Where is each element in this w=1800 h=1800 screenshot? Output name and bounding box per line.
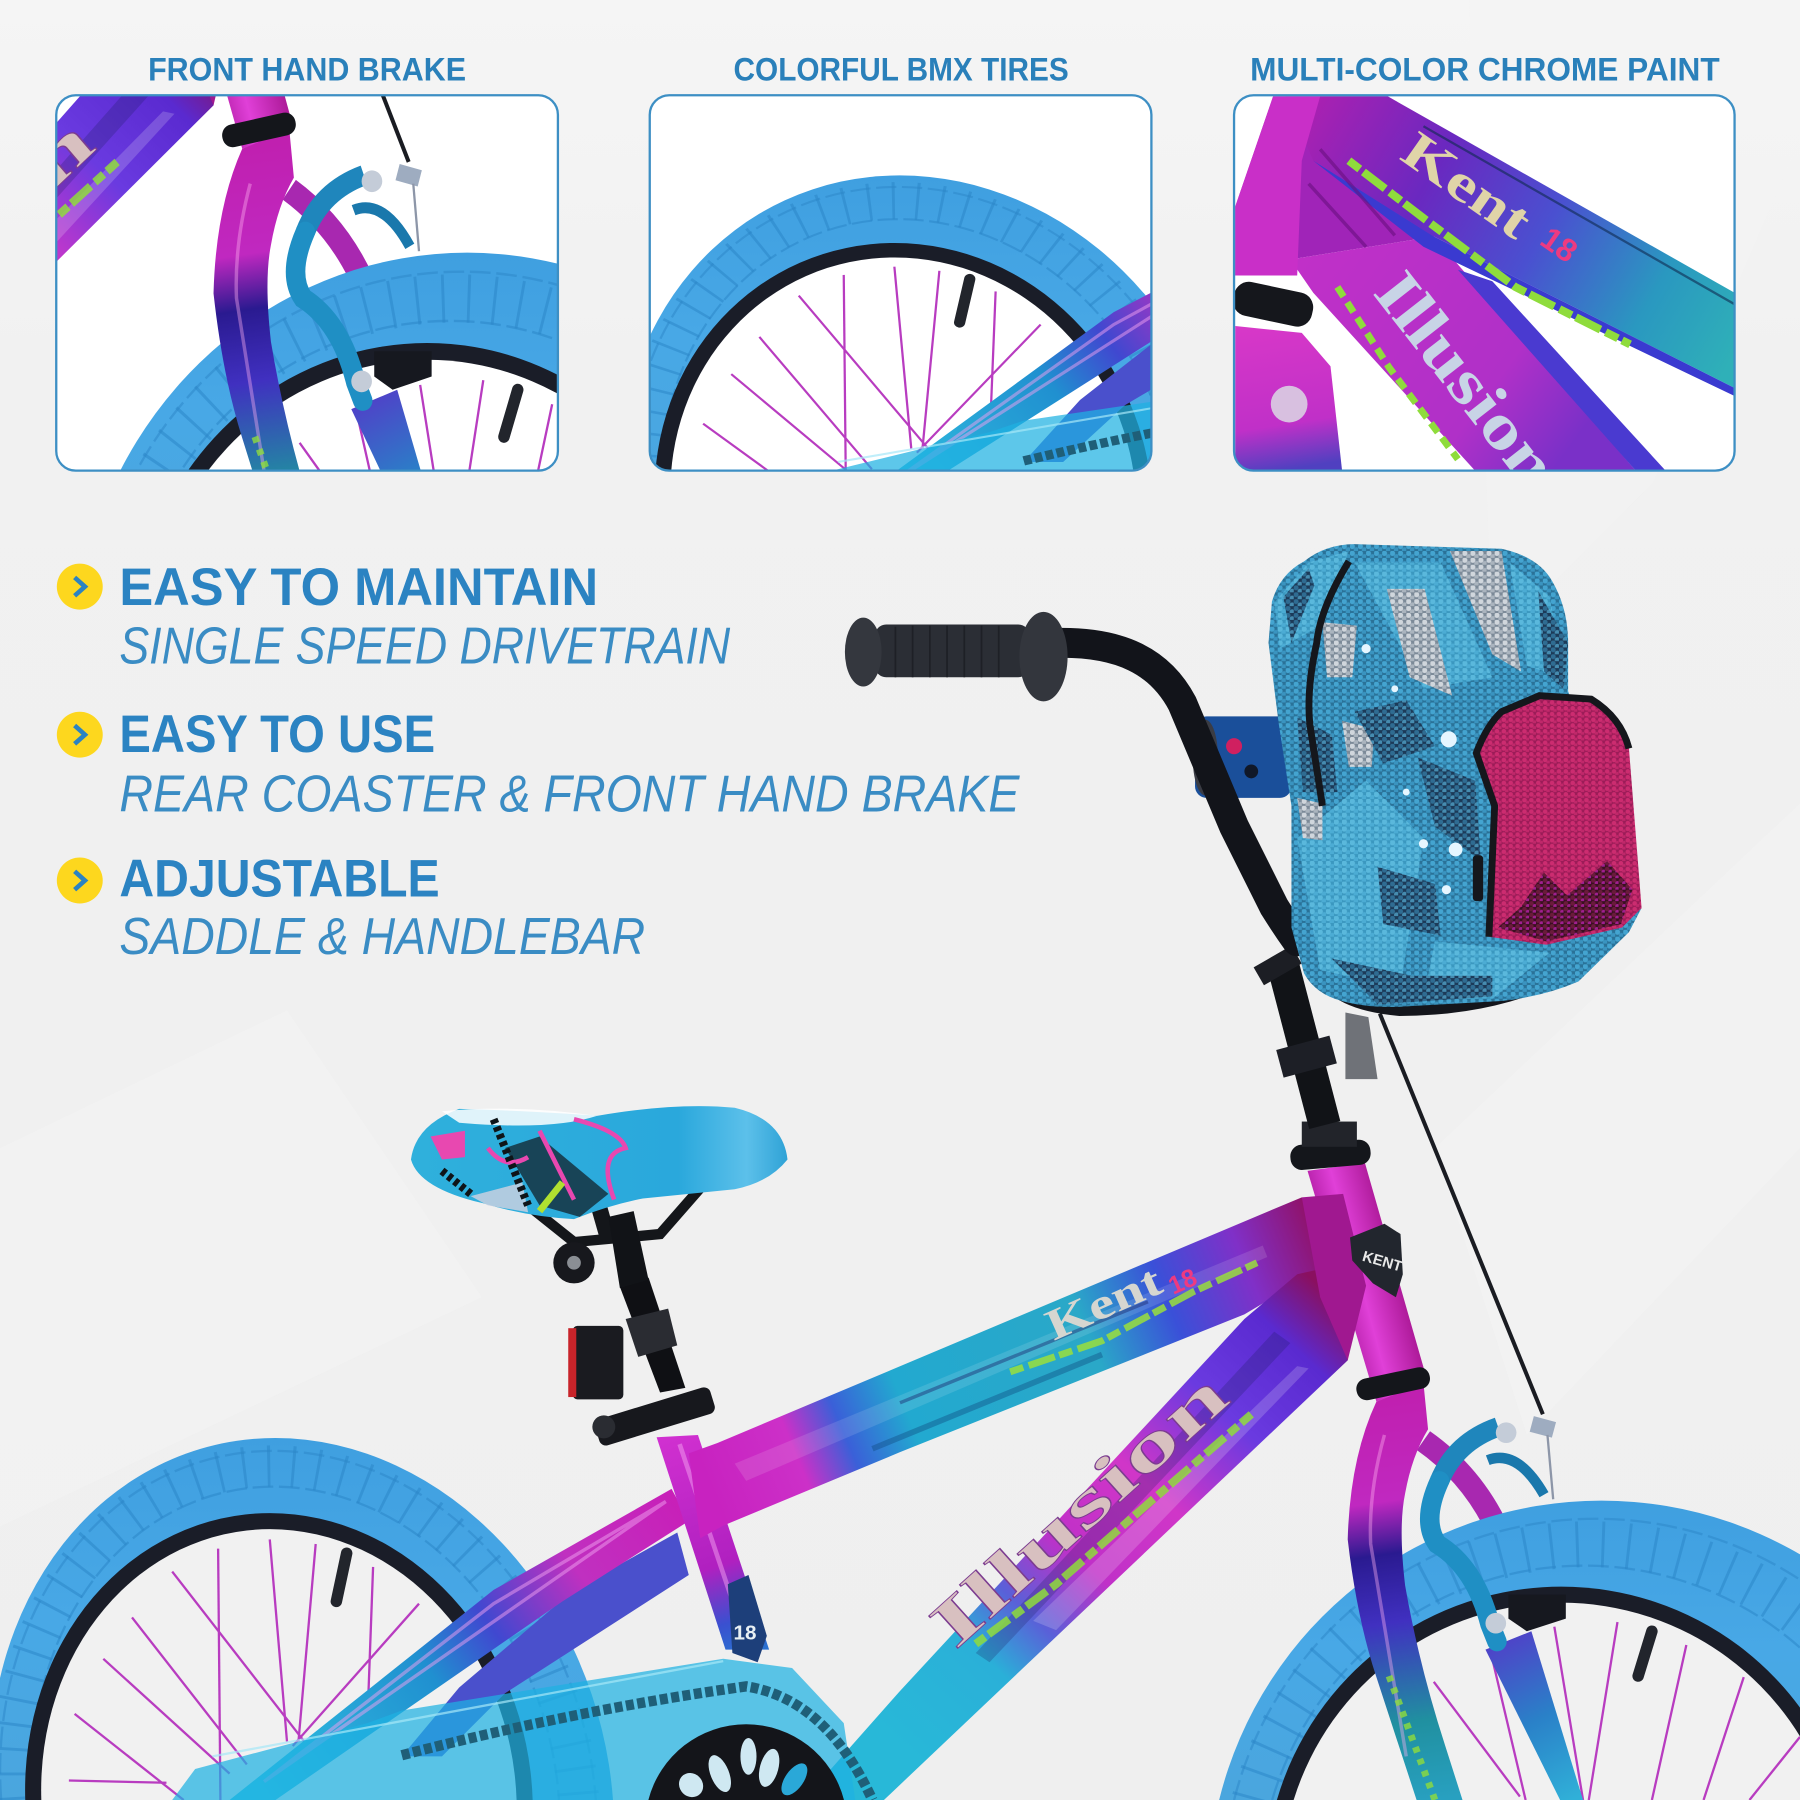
feature detail: REAR COASTER & FRONT HAND BRAKE <box>119 765 1020 823</box>
seat tube <box>657 1435 769 1662</box>
feature detail: SADDLE & HANDLEBAR <box>119 907 645 965</box>
front fork <box>1348 1383 1462 1800</box>
backpack silver patches <box>1297 551 1521 840</box>
shield badge: KENT <box>1360 1248 1404 1275</box>
icon: yellow chevron <box>57 858 103 903</box>
shield badge <box>1350 1224 1404 1297</box>
grip <box>845 612 1068 701</box>
seat tube: 18 <box>734 1621 757 1644</box>
frame close-up: Kent <box>1391 121 1543 251</box>
frame close-up: Illusion <box>1361 258 1572 500</box>
saddle rails <box>528 1188 700 1288</box>
decal: Kent 18: Kent <box>1038 1256 1170 1350</box>
icon: yellow chevron <box>57 712 103 758</box>
decal: Kent 18: 18 <box>1164 1263 1201 1300</box>
rear wheel <box>0 1438 613 1800</box>
icon: yellow chevron <box>57 564 103 610</box>
backpack pocket <box>1476 696 1642 945</box>
saddle <box>411 1106 788 1219</box>
backpack light sequin patches <box>1274 551 1564 999</box>
feature title: EASY TO MAINTAIN <box>119 558 598 617</box>
front wheel <box>1219 1501 1800 1800</box>
feature title: ADJUSTABLE <box>119 850 440 909</box>
decal: Illusion: Illusion <box>916 1358 1242 1662</box>
decal: Kent 18 <box>1010 1256 1257 1372</box>
feature detail: SINGLE SPEED DRIVETRAIN <box>119 617 731 675</box>
top tube <box>689 1197 1332 1538</box>
panel: front hand brake <box>55 94 560 472</box>
stem tube <box>1193 716 1291 798</box>
backpack glitter highlights <box>1361 644 1462 894</box>
heading: multi-color chrome paint: MULTI-COLOR CHROME PAINT <box>1250 51 1720 87</box>
backpack dark speckles <box>1283 568 1568 1004</box>
reflector <box>1345 1012 1378 1079</box>
heading: colorful bmx tires: COLORFUL BMX TIRES <box>734 51 1069 87</box>
chain ring <box>648 1724 844 1800</box>
rear reflector <box>568 1326 623 1399</box>
pocket dark sequins <box>1498 861 1632 941</box>
backpack <box>1268 544 1642 1016</box>
backpack base <box>1316 976 1527 1016</box>
handlebar <box>1062 643 1297 941</box>
bike crop: tire <box>620 0 1800 503</box>
feature: easy to maintain <box>57 558 731 675</box>
seat post <box>620 1278 685 1392</box>
head tube <box>1302 1163 1428 1402</box>
rear fork leg upper <box>1423 1441 1506 1550</box>
down tube <box>804 1263 1349 1800</box>
frame close-up <box>1230 96 1735 500</box>
decal: Illusion <box>916 1358 1251 1662</box>
chain <box>402 1686 872 1800</box>
feature title: EASY TO USE <box>119 705 435 764</box>
stem <box>1254 946 1337 1125</box>
head tube rings <box>1289 1122 1432 1402</box>
backpack body <box>1268 544 1642 1007</box>
panel: colorful bmx tires <box>648 94 1153 472</box>
heading: front hand brake: FRONT HAND BRAKE <box>148 51 466 87</box>
feature: adjustable <box>57 850 645 965</box>
feature: easy to use <box>57 705 1020 823</box>
frame close-up: 18 <box>1534 220 1584 270</box>
seat clamp <box>592 1386 717 1447</box>
bike illustration <box>0 612 1800 1800</box>
panel: multi-color chrome paint <box>1230 95 1735 500</box>
rear fork leg lower <box>1485 1631 1583 1800</box>
pocket zipper edge <box>1476 696 1629 937</box>
brake cable <box>1380 1014 1543 1414</box>
chain guard <box>172 1659 855 1800</box>
pocket zipper pull <box>1473 855 1483 901</box>
bike crop: brake <box>0 0 849 569</box>
brake <box>1430 1416 1566 1642</box>
backpack zipper <box>1309 561 1349 806</box>
rear stays <box>230 1489 689 1800</box>
